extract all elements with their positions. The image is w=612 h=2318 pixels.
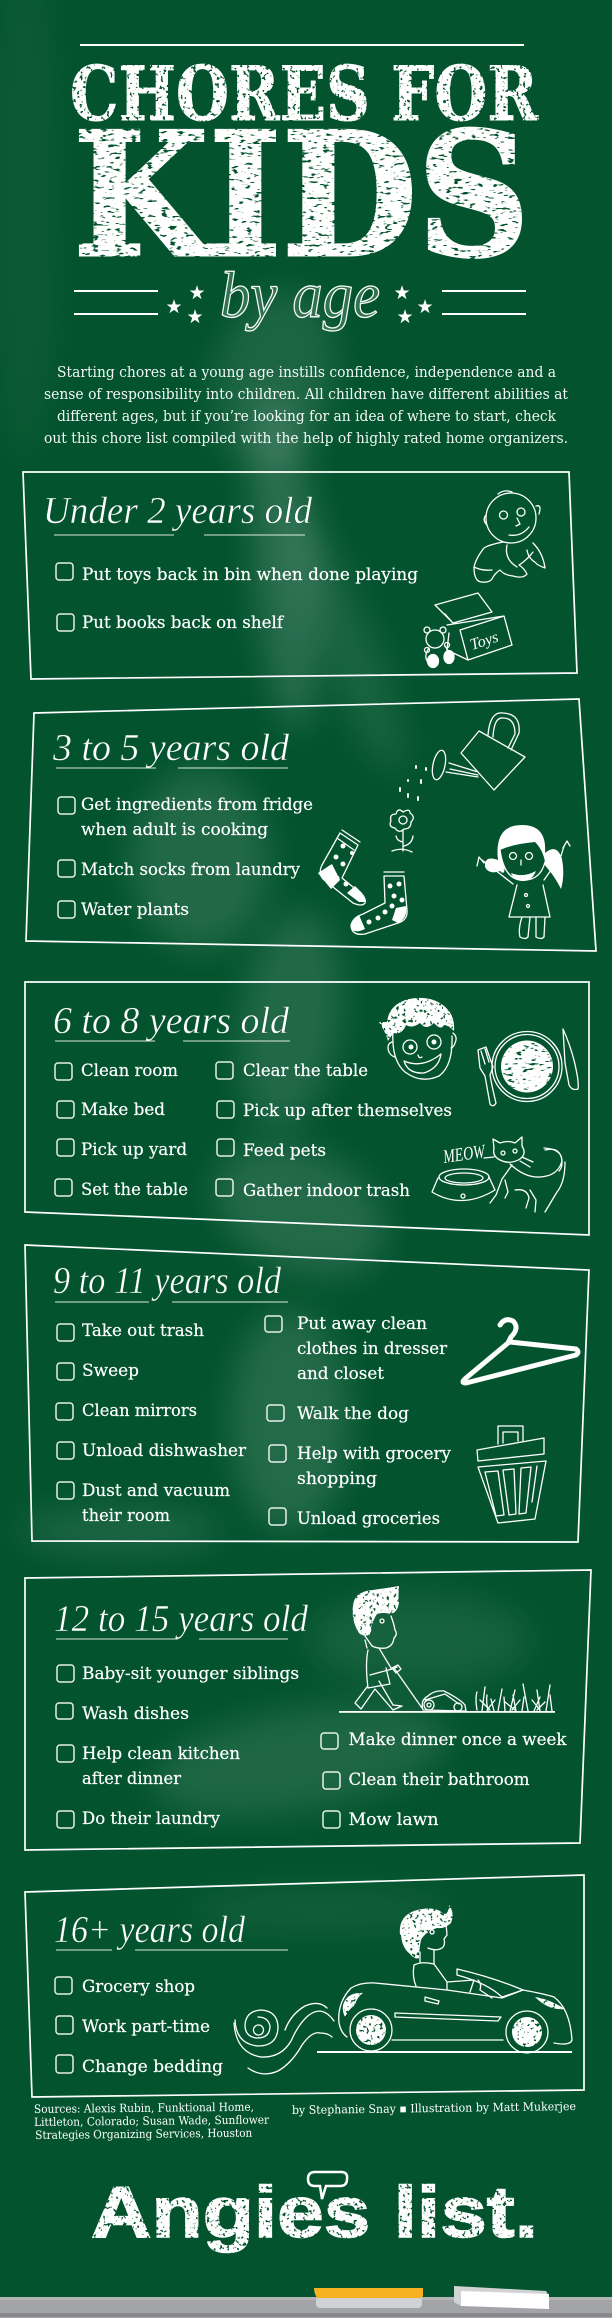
- chore: gather indoor trash: Gather indoor trash: [243, 1181, 410, 1201]
- chore: toys: Put toys back in bin when done playing: [82, 565, 418, 585]
- subtitle: by age with stars: ★: [188, 282, 206, 304]
- icon: baby: [474, 491, 545, 582]
- intro paragraph: out this chore list compiled with the help of highly rated home organizers.: [44, 431, 568, 447]
- chore: pick up yard: Pick up yard: [81, 1140, 187, 1160]
- panel: under 2 years old: [23, 472, 577, 679]
- chore: grocery shopping: shopping: [297, 1469, 377, 1489]
- icon: cat and bowl: MEOW: [441, 1141, 488, 1168]
- icon: trash can: [477, 1426, 546, 1523]
- subtitle: by age with stars: ★: [396, 306, 414, 328]
- chore: walk the dog: Walk the dog: [297, 1404, 409, 1424]
- subtitle: by age with stars: ★: [393, 282, 411, 304]
- panel: 6 to 8 years old: [25, 982, 589, 1235]
- sources text: [34, 2100, 270, 2142]
- icon: boy face: [379, 998, 456, 1079]
- chore: clean room: Clean room: [81, 1061, 178, 1081]
- chore: clear the table: Clear the table: [243, 1061, 368, 1081]
- chalk tray: [0, 2286, 612, 2318]
- chore: take out trash: Take out trash: [82, 1321, 204, 1341]
- intro paragraph: [44, 365, 568, 447]
- heading: 3 to 5: 3 to 5 years old: [52, 727, 290, 769]
- chore: dust and vacuum: their room: [82, 1506, 170, 1526]
- chore: laundry: Do their laundry: [82, 1809, 220, 1829]
- icon: flower: [390, 810, 413, 852]
- chore: grocery shop: Grocery shop: [82, 1977, 195, 1997]
- byline: by Stephanie Snay ▪ Illustration by Matt Mukerjee: [292, 2099, 576, 2117]
- chore: put away clothes: [265, 1314, 448, 1384]
- eraser: [314, 2288, 423, 2308]
- chore: set the table: Set the table: [81, 1180, 188, 1200]
- chore: put away clothes: clothes in dresser: [297, 1339, 448, 1359]
- intro paragraph: Starting chores at a young age instills confidence, independence and a: [57, 365, 556, 381]
- heading: under 2: Under 2 years old: [43, 490, 313, 532]
- icon: cat and bowl: [432, 1137, 565, 1212]
- chore: ingredients: [58, 795, 313, 840]
- chore: change bedding: Change bedding: [82, 2057, 223, 2077]
- panel: 9 to 11 years old: [25, 1245, 589, 1542]
- subtitle: by age with stars: ★: [416, 296, 434, 318]
- chore: bathroom: Clean their bathroom: [348, 1770, 530, 1790]
- panel: 16+ years old: [25, 1875, 584, 2097]
- panel: 12 to 15 years old: [25, 1570, 591, 1850]
- heading: 6 to 8: 6 to 8 years old: [53, 1000, 290, 1042]
- chore: make bed: Make bed: [81, 1100, 165, 1120]
- chore: socks: Match socks from laundry: [81, 860, 300, 880]
- sources text: Littleton, Colorado; Susan Wade, Sunflower: [34, 2113, 270, 2129]
- chore: feed pets: [217, 1139, 326, 1161]
- chore: ingredients: when adult is cooking: [81, 820, 268, 840]
- chore: work part-time: Work part-time: [82, 2017, 210, 2037]
- chore: pick up after themselves: Pick up after themselves: [243, 1101, 452, 1121]
- heading: 12 to 15: 12 to 15 years old: [54, 1598, 309, 1640]
- panel: 3 to 5 years old: [26, 699, 596, 951]
- intro paragraph: sense of responsibility into children. All children have different abilities at: [44, 387, 568, 403]
- chore: clean kitchen: [57, 1744, 240, 1789]
- chalk stick: [454, 2286, 549, 2309]
- chore: clean kitchen: after dinner: [82, 1769, 182, 1789]
- chore: grocery shopping: Help with grocery: [297, 1444, 451, 1464]
- chore: clean mirrors: Clean mirrors: [82, 1401, 197, 1421]
- title: chores for kids: [70, 44, 539, 296]
- icon: watering can: [400, 713, 525, 800]
- chore: sweep: Sweep: [82, 1361, 139, 1381]
- chore: put away clothes: Put away clean: [297, 1314, 427, 1334]
- chore: baby-sit: Baby-sit younger siblings: [82, 1664, 299, 1684]
- icon: plate and cutlery: [478, 1029, 578, 1106]
- chore: ingredients: Get ingredients from fridge: [81, 795, 313, 815]
- chore: sweep: [57, 1361, 139, 1381]
- chore: wash dishes: Wash dishes: [82, 1704, 189, 1724]
- icon: boy mowing lawn: [339, 1586, 555, 1713]
- icon: teen driving car: [234, 1905, 572, 2074]
- chore: dust and vacuum: [57, 1481, 230, 1526]
- chore: clean kitchen: Help clean kitchen: [82, 1744, 240, 1764]
- subtitle: by age with stars: ★: [165, 296, 183, 318]
- sources text: Strategies Organizing Services, Houston: [35, 2126, 253, 2142]
- chore: books: Put books back on shelf: [82, 613, 285, 633]
- chore: make dinner: Make dinner once a week: [348, 1730, 567, 1750]
- icon: girl with pigtails: [477, 825, 570, 938]
- chore: unload dishwasher: Unload dishwasher: [82, 1441, 247, 1461]
- heading: 16+: 16+ years old: [54, 1909, 246, 1951]
- chore: water plants: Water plants: [81, 900, 189, 920]
- icon: hanger: [463, 1320, 578, 1383]
- chore: unload groceries: Unload groceries: [297, 1509, 440, 1529]
- chore: dust and vacuum: Dust and vacuum: [82, 1481, 230, 1501]
- intro paragraph: different ages, but if you’re looking for an idea of where to start, check: [57, 409, 556, 425]
- sources text: Sources: Alexis Rubin, Funktional Home,: [34, 2100, 254, 2116]
- logo: angie's list: Angies list.: [91, 2173, 538, 2253]
- chore: put away clothes: and closet: [297, 1364, 384, 1384]
- chore: mow lawn: Mow lawn: [348, 1810, 439, 1830]
- subtitle: by age with stars: by age: [220, 259, 380, 332]
- icon: toy box and bear: [424, 593, 512, 668]
- heading: 9 to 11: 9 to 11 years old: [53, 1260, 282, 1302]
- title line: kids: KIDS: [73, 95, 530, 296]
- subtitle: by age with stars: [74, 259, 526, 332]
- icon: toy box and bear: Toys: [468, 629, 501, 654]
- subtitle: by age with stars: ★: [186, 306, 204, 328]
- chore: grocery shopping: [269, 1444, 451, 1489]
- chore: feed pets: Feed pets: [243, 1141, 326, 1161]
- icon: socks: [318, 830, 407, 934]
